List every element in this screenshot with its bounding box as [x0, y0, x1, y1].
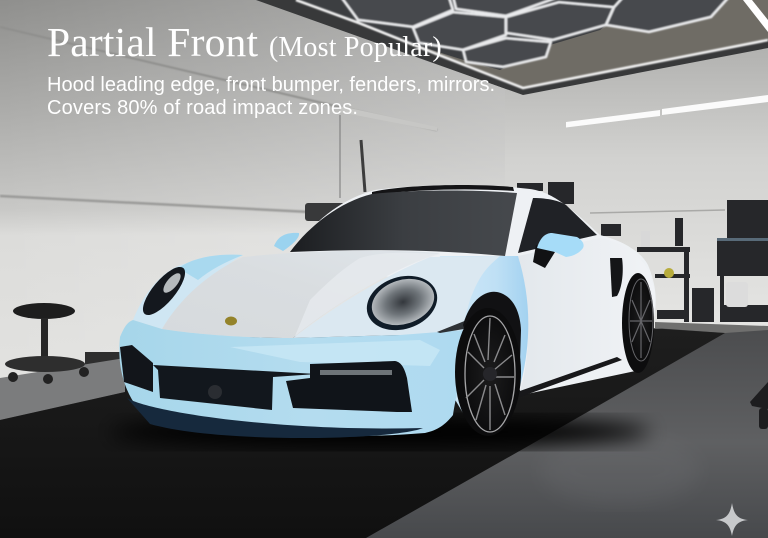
roof seal [372, 185, 514, 195]
front wheel [455, 292, 521, 436]
roof and rear body [290, 185, 656, 395]
watermark sparkle [716, 503, 748, 536]
side window [518, 198, 597, 253]
side sill [517, 357, 622, 397]
car [110, 185, 656, 448]
black mat [0, 328, 725, 538]
shadow [110, 416, 650, 448]
title: Partial Front (Most Popular) [47, 19, 442, 65]
description: Covers 80% of road impact zones. [47, 97, 358, 119]
corner cart [750, 382, 768, 429]
left fender [133, 255, 243, 329]
description [47, 74, 495, 119]
hood [162, 251, 440, 338]
headlights [136, 261, 444, 339]
ceiling with hexagon lights [256, 0, 768, 95]
description: Hood leading edge, front bumper, fenders, mirrors. [47, 74, 495, 96]
lower grille center [153, 365, 317, 410]
back walls [0, 0, 768, 380]
turn marker [437, 320, 467, 333]
front fender film [420, 256, 528, 425]
lower grille left [120, 345, 153, 392]
floor [0, 322, 768, 538]
windshield [290, 190, 517, 256]
side vent [610, 258, 623, 297]
rear wheel [622, 273, 654, 373]
wall light bar [566, 110, 660, 128]
front right fender [293, 256, 500, 338]
badge [225, 316, 237, 326]
mirrors [274, 233, 584, 268]
lower grille right [286, 361, 412, 412]
bumper [119, 320, 465, 436]
lower lip [127, 398, 423, 438]
door panel [518, 238, 655, 392]
stool [5, 303, 89, 384]
right shelves and equipment [305, 115, 768, 322]
